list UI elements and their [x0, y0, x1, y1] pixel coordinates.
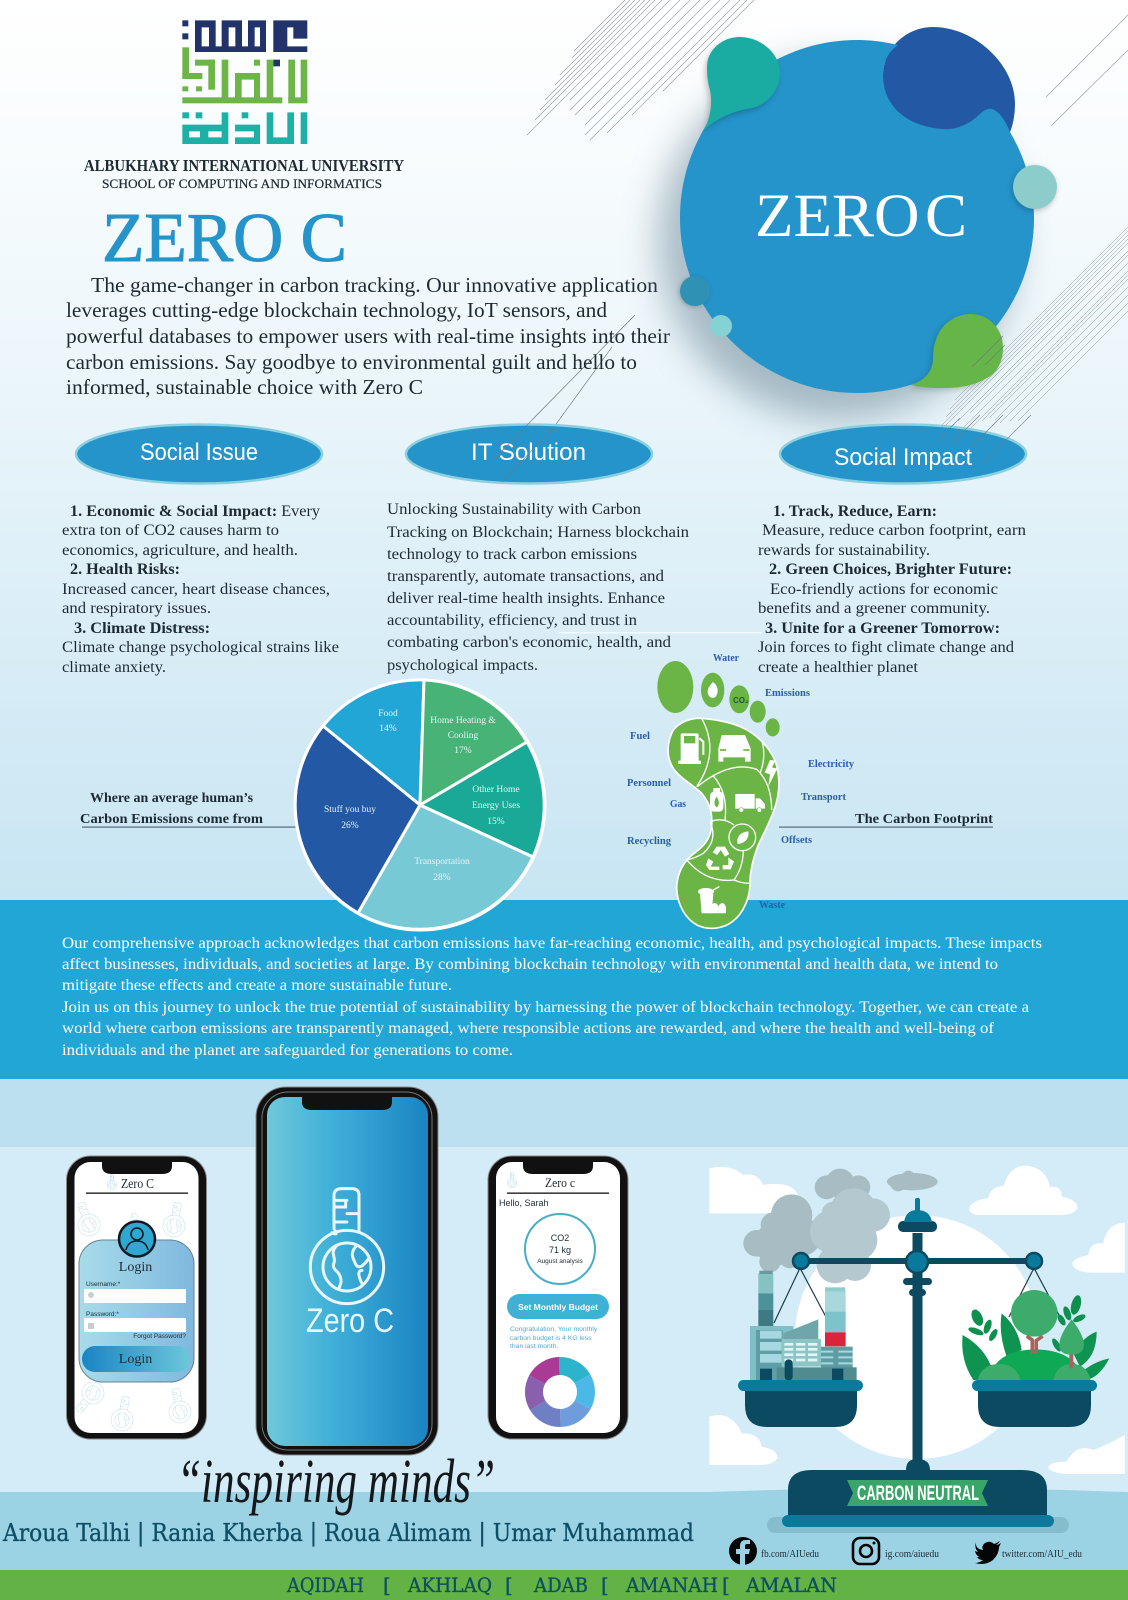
footprint labels: Offsets: [781, 835, 812, 846]
icon: lightning: [765, 760, 777, 787]
badge title: ZERO C: [755, 183, 967, 250]
text: Social Impact: [758, 503, 1026, 676]
phone: login screen: Forgot Password?: [133, 1333, 186, 1340]
icon: waste bin: [698, 887, 726, 913]
icon: truck: [735, 794, 765, 812]
text: Social Impact: rewards for sustainability.: [758, 542, 930, 559]
scale strings: [774, 1268, 1060, 1323]
green drop: [911, 314, 1003, 388]
slice: Other Home Energy: [420, 742, 544, 857]
congratulation text: Congratulation, Your monthly: [510, 1326, 598, 1333]
pill: Social Impact: [780, 424, 1026, 484]
blue text band: [0, 900, 1128, 1079]
footprint labels: Personnel: [627, 778, 671, 789]
footer values: AMANAH: [625, 1573, 718, 1597]
sun: [795, 1215, 1039, 1459]
pie labels: 17%: [454, 746, 472, 756]
pie labels: 15%: [487, 817, 505, 827]
scale column and beam: [793, 1198, 1042, 1470]
sky and clouds: [709, 1166, 1125, 1474]
text: Social Issue: [62, 503, 339, 676]
lower background bands: [0, 1079, 1128, 1147]
app name: Zero C: [306, 1302, 394, 1340]
congratulation text: [510, 1326, 598, 1350]
pie chart label: Where an average human’s: [90, 791, 254, 806]
smoke: [743, 1169, 938, 1283]
login button: Login: [119, 1352, 152, 1367]
footprint labels: CO₂: [733, 696, 749, 705]
teal drop: [704, 37, 780, 130]
band paragraph: Join us on this journey to unlock the true potential of sustainability by harnessing the power of blockchain technology. Together, we can create a: [62, 999, 1029, 1016]
slice: Transportation: [358, 805, 533, 929]
text: Social Issue: 1. Economic & Social Impact: Every: [70, 503, 320, 520]
text: Social Issue: economics, agriculture, and health.: [62, 542, 298, 559]
text: Social Issue: 3. Climate Distress:: [74, 620, 210, 637]
intro paragraph: carbon emissions. Say goodbye to environmental guilt and hello to: [66, 350, 637, 374]
footer values: [: [505, 1573, 513, 1597]
footprint foot: [657, 661, 780, 928]
team names: Aroua Talhi | Rania Kherba | Roua Alimam | Umar Muhammad: [2, 1519, 694, 1548]
phone: login screen: Login: [119, 1260, 152, 1275]
footprint labels: Fuel: [630, 731, 650, 742]
text: IT Solution: Tracking on Blockchain; Harness blockchain: [387, 524, 689, 541]
text: IT Solution: deliver real-time health insights. Enhance: [387, 590, 665, 607]
text: Social Issue: 2. Health Risks:: [70, 561, 180, 578]
avatar icon: [119, 1222, 155, 1256]
banner: carbon neutral: CARBON NEUTRAL: [857, 1482, 979, 1505]
footer values: AMALAN: [745, 1573, 837, 1597]
hero badge: ZERO C circle: [658, 27, 1057, 420]
band paragraph: individuals and the planet are safeguarded for generations to come.: [62, 1042, 513, 1059]
band paragraph: affect businesses, individuals, and societies at large. By combining blockchain technology with environmental and health data, we intend to: [62, 956, 998, 973]
slice: Home Heating: [420, 680, 527, 805]
CO2 gauge: CO2: [551, 1233, 569, 1243]
text: IT Solution: combating carbon's economic, health, and: [387, 634, 671, 651]
text: IT Solution: Unlocking Sustainability with Carbon: [387, 501, 641, 518]
slice: Food: [323, 680, 424, 805]
icon: car: [718, 735, 751, 762]
footprint labels: Transport: [801, 792, 847, 803]
text: IT Solution: [387, 501, 689, 674]
social links: ig.com/aiuedu: [885, 1549, 939, 1560]
navy drop behind circle: [880, 27, 1015, 140]
text: Social Issue: extra ton of CO2 causes harm to: [62, 522, 279, 539]
greenery: [962, 1290, 1109, 1381]
text: Social Impact: create a healthier planet: [758, 659, 919, 676]
footer values: [: [601, 1573, 609, 1597]
decorative long lines: [532, 315, 635, 427]
text: IT Solution: technology to track carbon emissions: [387, 546, 637, 563]
ground: [709, 1488, 1125, 1570]
text: Social Impact: 2. Green Choices, Brighter Future:: [769, 561, 1012, 578]
CO2 gauge: August analysis: [537, 1258, 584, 1265]
pie labels: 26%: [341, 821, 359, 831]
intro paragraph: [66, 273, 670, 399]
footer values: ADAB: [533, 1573, 588, 1597]
pie labels: Food: [378, 709, 398, 719]
phone: splash screen: [256, 1087, 438, 1455]
phone: login screen: [66, 1156, 206, 1439]
pill: Social Issue: Social Issue: [140, 439, 258, 466]
intro paragraph: The game-changer in carbon tracking. Our innovative application: [91, 273, 659, 297]
band paragraph: [62, 935, 1042, 1059]
university name: ALBUKHARY INTERNATIONAL UNIVERSITY: [84, 156, 404, 175]
intro paragraph: leverages cutting-edge blockchain technology, IoT sensors, and: [66, 298, 607, 322]
footer values: [: [383, 1573, 391, 1597]
slice: Stuff you buy: [295, 726, 420, 913]
footer values: AQIDAH: [286, 1573, 364, 1597]
CO2 gauge: [525, 1214, 595, 1284]
small pale circle: [710, 315, 732, 337]
social links: twitter.com/AIU_edu: [1002, 1549, 1082, 1560]
pill: IT Solution: [406, 424, 652, 484]
main circle: [680, 40, 1034, 393]
app logo icon: [310, 1189, 384, 1304]
social links: fb.com/AIUedu: [761, 1549, 819, 1560]
banner: carbon neutral: [847, 1480, 988, 1506]
icon: leaf: [737, 831, 748, 844]
band paragraph: world where carbon emissions are transparently managed, where responsible actions are rewarded, and where the health and well-being of: [62, 1020, 995, 1037]
pie labels: 28%: [433, 873, 451, 883]
faint logo watermarks: [69, 1199, 193, 1433]
pie chart label: [80, 791, 296, 828]
university logo: [182, 20, 307, 144]
login card: [79, 1240, 194, 1382]
pie chart: emissions sources: [294, 678, 546, 932]
logo: teal row: [182, 112, 307, 144]
phone: login screen: Zero C: [121, 1177, 154, 1192]
phone: dashboard screen: Zero c: [545, 1175, 575, 1190]
footprint labels: Emissions: [765, 688, 810, 699]
footer values: [286, 1573, 837, 1597]
logo: navy row: [182, 20, 307, 52]
social links: [729, 1537, 1082, 1565]
logo: green row: [182, 47, 307, 103]
CO2 gauge: 71 kg: [549, 1245, 571, 1255]
intro paragraph: powerful databases to empower users with real-time insights into their: [66, 324, 670, 348]
donut chart: [534, 1366, 586, 1418]
pie labels: Energy Uses: [472, 801, 520, 811]
footprint labels: Waste: [759, 900, 786, 911]
text: Social Issue: climate anxiety.: [62, 659, 166, 676]
phone: login screen: Username:*: [86, 1281, 121, 1288]
login button: [82, 1346, 190, 1372]
pill: Social Impact: Social Impact: [834, 444, 972, 471]
text: Social Issue: Climate change psychological strains like: [62, 639, 339, 656]
pie labels: [324, 709, 520, 883]
text: IT Solution: transparently, automate transactions, and: [387, 568, 664, 585]
intro paragraph: informed, sustainable choice with Zero C: [66, 375, 423, 399]
university name: [84, 156, 404, 191]
text: Social Impact: Eco-friendly actions for economic: [770, 581, 998, 598]
text: Social Impact: Measure, reduce carbon footprint, earn: [762, 522, 1026, 539]
pie labels: Home Heating &: [430, 716, 496, 726]
footprint labels: Water: [713, 653, 740, 664]
icon: water drop: [708, 682, 718, 698]
text: IT Solution: accountability, efficiency, and trust in: [387, 612, 637, 629]
phone: login screen: Password:*: [86, 1311, 119, 1318]
congratulation text: carbon budget is 4 KG less: [510, 1335, 592, 1342]
icon: instagram: [853, 1538, 879, 1564]
footprint labels: Recycling: [627, 836, 671, 847]
carbon footprint diagram: [627, 653, 993, 928]
pie labels: Transportation: [414, 857, 470, 867]
phone: dashboard screen: Hello, Sarah: [499, 1198, 549, 1208]
text: IT Solution: psychological impacts.: [387, 657, 538, 674]
phone: dashboard screen: [488, 1156, 628, 1439]
title: ZERO C: [102, 200, 347, 277]
budget button: [507, 1294, 609, 1319]
tagline: inspiring minds: “inspiring minds”: [177, 1449, 495, 1516]
footer values: AKHLAQ: [407, 1573, 492, 1597]
budget button: Set Monthly Budget: [518, 1302, 598, 1312]
icon: facebook: [729, 1537, 757, 1565]
footer values: [: [722, 1573, 730, 1597]
pill: IT Solution: IT Solution: [471, 439, 586, 466]
icon: gas cylinder: [710, 788, 723, 812]
band paragraph: Our comprehensive approach acknowledges that carbon emissions have far-reaching economic, health, and psychological impacts. These impacts: [62, 935, 1042, 952]
illustration: carbon neutral scale: [709, 1166, 1125, 1570]
pie labels: Stuff you buy: [324, 804, 376, 815]
text: Social Impact: 3. Unite for a Greener Tomorrow:: [765, 620, 1000, 637]
pie labels: Cooling: [448, 731, 479, 741]
footprint caption: The Carbon Footprint: [855, 812, 993, 827]
pale circle: [1013, 165, 1057, 209]
footprint labels: [627, 653, 854, 911]
university name: SCHOOL OF COMPUTING AND INFORMATICS: [102, 177, 382, 191]
scale pans: [738, 1380, 1097, 1427]
band paragraph: mitigate these effects and create a more sustainable future.: [62, 977, 452, 994]
text: Social Issue: and respiratory issues.: [62, 600, 211, 617]
pie labels: 14%: [379, 724, 397, 734]
text: Social Impact: 1. Track, Reduce, Earn:: [773, 503, 937, 520]
text: Social Issue: Increased cancer, heart disease chances,: [62, 581, 330, 598]
pie labels: Other Home: [472, 785, 520, 795]
icon: recycle: [706, 847, 734, 870]
icon: twitter: [975, 1541, 1001, 1564]
icon: fuel pump: [678, 733, 703, 764]
decorative hatch top: [527, 0, 1128, 140]
factory: [750, 1271, 857, 1381]
text: Social Impact: benefits and a greener community.: [758, 600, 990, 617]
text: Social Impact: Join forces to fight climate change and: [758, 639, 1014, 656]
dark teal circle: [680, 276, 710, 306]
footprint labels: Gas: [670, 799, 686, 810]
scale base: [767, 1470, 1069, 1533]
congratulation text: than last month.: [510, 1343, 558, 1350]
pie chart label: Carbon Emissions come from: [80, 812, 263, 827]
decorative hatch lower right: [938, 227, 1128, 433]
footprint labels: Electricity: [808, 759, 854, 770]
pill: Social Issue: [76, 424, 322, 484]
